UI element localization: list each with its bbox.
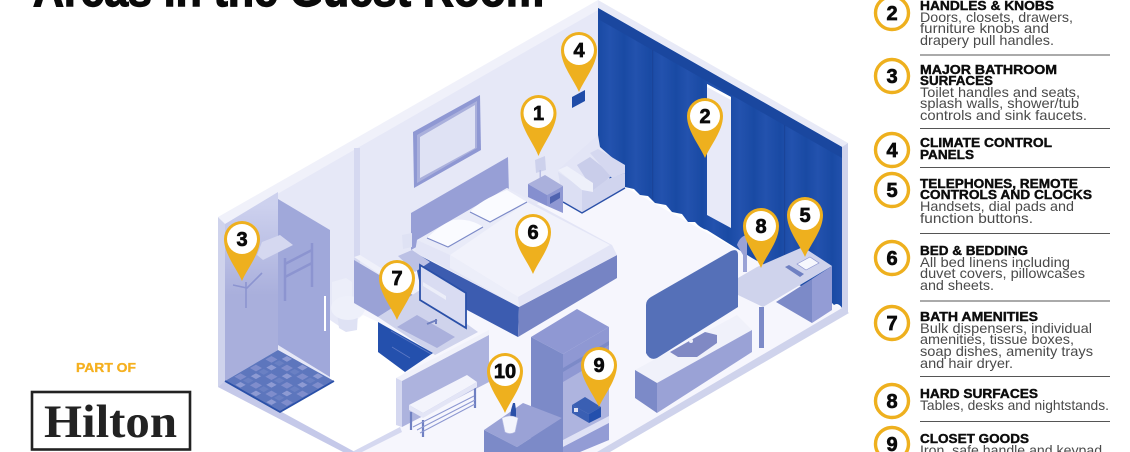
window [707, 84, 731, 228]
mirror [420, 265, 466, 328]
low partition wall [396, 330, 489, 427]
legend item 8 [876, 384, 1110, 422]
Hilton logo: Hilton [44, 396, 177, 448]
desk chair [737, 235, 747, 272]
ice bucket [502, 416, 518, 434]
pin 10: 10 [494, 361, 516, 383]
legend item 7: soap dishes, amenity trays [920, 343, 1093, 359]
legend item 3 [876, 60, 1110, 129]
armchair [558, 135, 625, 213]
legend item 6 [876, 242, 1110, 302]
nightstand and lamp [528, 156, 563, 213]
pin 5 [787, 197, 823, 257]
wardrobe [531, 309, 609, 452]
side table with ice bucket [484, 403, 562, 452]
legend item 5: TELEPHONES, REMOTE [920, 177, 1078, 191]
pin 10 [487, 353, 523, 413]
pin 9: 9 [593, 355, 605, 377]
pin 3: 3 [236, 229, 248, 251]
pin 7 [379, 260, 415, 320]
part of label: PART OF [76, 360, 136, 375]
headboard [411, 157, 509, 250]
shower shelf [257, 235, 293, 260]
pin 8 [743, 208, 779, 268]
left nightstand and lamp [398, 233, 430, 272]
legend item 7: BATH AMENITIES [920, 310, 1038, 324]
faucet [427, 319, 437, 324]
telephone [797, 257, 819, 270]
pin 3 [224, 221, 260, 281]
vanity wall [354, 255, 420, 317]
legend item 3: MAJOR BATHROOM [920, 63, 1057, 77]
television [646, 250, 738, 359]
vanity cabinet [378, 322, 433, 372]
legend item 6: duvet covers, pillowcases [920, 265, 1085, 281]
legend item 3: 3 [886, 66, 898, 88]
bathroom floor [280, 315, 405, 452]
legend item 7: and hair dryer. [920, 355, 1013, 371]
isometric guest room illustration [218, 0, 849, 452]
pin 8: 8 [755, 216, 767, 238]
sink [397, 315, 455, 348]
remote [785, 265, 804, 277]
legend item 5 [876, 174, 1110, 234]
pin 2 [687, 98, 723, 158]
pin 6 [515, 214, 551, 274]
legend item 9 [876, 428, 1106, 452]
wall pilaster [354, 148, 360, 263]
legend item 6: All bed linens including [920, 254, 1070, 270]
bed [413, 188, 617, 337]
pillow left [427, 220, 483, 247]
brand block: part of Hilton [32, 360, 190, 450]
pin 4 [561, 32, 597, 92]
pin 1 [520, 95, 556, 156]
legend item 3: Toilet handles and seats, [920, 84, 1080, 100]
shower door handle [324, 296, 326, 331]
curtains [598, 8, 842, 308]
wall picture [413, 95, 481, 188]
shower enclosure [225, 192, 334, 412]
pin 2: 2 [699, 106, 711, 128]
pillow right [470, 190, 527, 222]
pin 4: 4 [573, 40, 585, 62]
legend item 3: splash walls, shower/tub [920, 95, 1079, 111]
location pins [224, 32, 823, 413]
pin 6: 6 [527, 222, 539, 244]
wall top bands [218, 0, 848, 387]
legend item 2 [876, 0, 1110, 56]
pin 7: 7 [391, 268, 403, 290]
mosaic shower floor [225, 350, 334, 412]
legend item 9: CLOSET GOODS [920, 432, 1029, 446]
towel rack [285, 243, 312, 301]
desk [738, 247, 832, 348]
room floor [352, 172, 842, 452]
legend item 5: 5 [886, 180, 898, 202]
legend item 3: controls and sink faucets. [920, 107, 1087, 123]
legend item 7: Bulk dispensers, individual [920, 320, 1092, 336]
legend item 8: 8 [886, 391, 898, 413]
legend item 4: CLIMATE CONTROL [920, 136, 1052, 150]
back wall [218, 8, 598, 452]
pin 5: 5 [799, 205, 811, 227]
safe [572, 397, 601, 423]
legend item 2: drapery pull handles. [920, 32, 1054, 48]
legend list [876, 0, 1110, 452]
legend item 2: furniture knobs and [920, 20, 1049, 36]
legend item 6: 6 [886, 248, 898, 270]
legend item 4: 4 [886, 140, 898, 162]
legend item 3: SURFACES [920, 74, 993, 88]
legend item 6: and sheets. [920, 277, 994, 293]
pin 1: 1 [533, 103, 544, 125]
legend item 7: amenities, tissue boxes, [920, 331, 1074, 347]
vanity unit [378, 265, 478, 372]
legend item 2: 2 [886, 3, 898, 25]
tv unit [635, 315, 752, 413]
toilet [331, 278, 365, 332]
legend item 5: CONTROLS AND CLOCKS [920, 188, 1092, 202]
wall thermostat panel [572, 90, 585, 108]
champagne bottle [510, 403, 516, 419]
legend item 6: BED & BEDDING [920, 244, 1028, 258]
legend item 7 [876, 306, 1110, 377]
legend item 5: Handsets, dial pads and [920, 198, 1074, 214]
legend item 8: Tables, desks and nightstands. [920, 397, 1109, 413]
pin 9 [581, 347, 617, 407]
shower fixture [233, 273, 262, 308]
legend item 7: 7 [886, 313, 898, 335]
legend item 4: PANELS [920, 148, 974, 162]
legend item 4 [876, 134, 1110, 168]
floor edge bands [218, 308, 849, 452]
legend item 5: function buttons. [920, 210, 1033, 226]
legend item 2: Doors, closets, drawers, [920, 9, 1073, 25]
bench [409, 375, 477, 437]
legend item 8: HARD SURFACES [920, 387, 1038, 401]
